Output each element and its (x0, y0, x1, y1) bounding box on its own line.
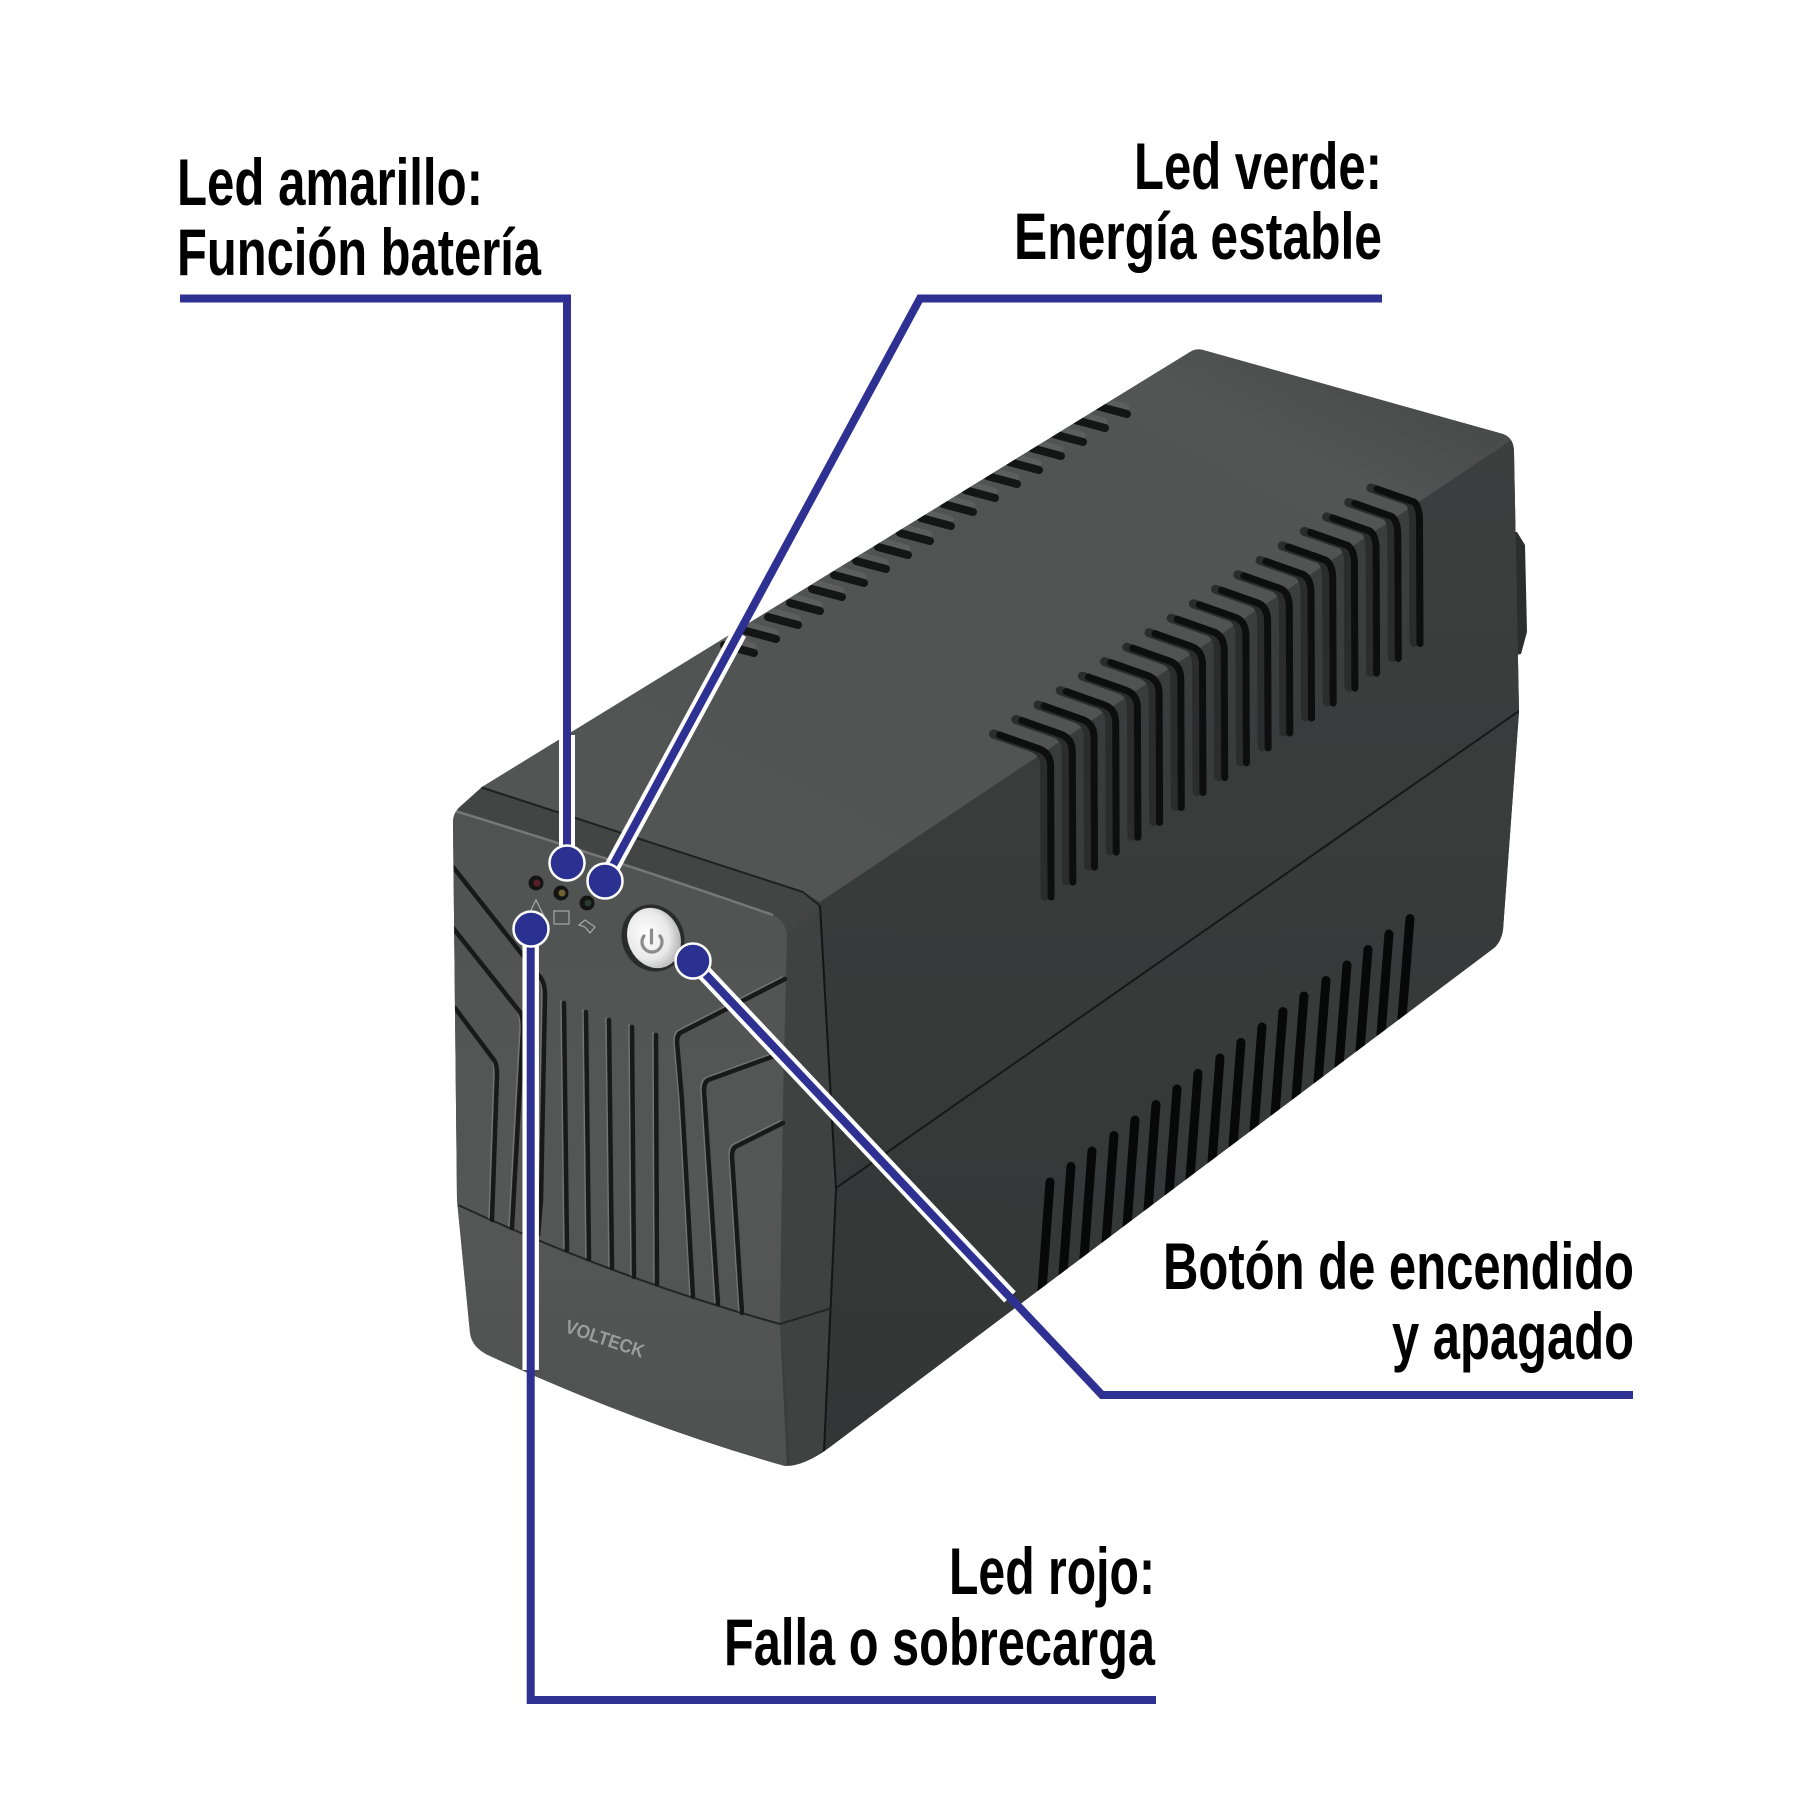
label: Boton de encendido: Botón de encendido (1163, 1229, 1634, 1303)
front rib highlights (488, 976, 783, 1312)
label: Led verde (1014, 129, 1382, 273)
leader line: Led verde (588, 298, 1382, 898)
label: Led amarillo: Función batería (177, 215, 542, 289)
top face (478, 345, 1516, 902)
label: Led rojo: Led rojo: (949, 1534, 1155, 1608)
label: Led amarillo: Led amarillo: (177, 145, 483, 219)
leader line: Led amarillo (180, 298, 584, 880)
label: Led rojo (724, 1534, 1156, 1679)
product: UPS unit (450, 345, 1527, 1470)
front panel top highlight (455, 811, 773, 915)
side seam line (836, 711, 1519, 1188)
LED: red (528, 876, 544, 890)
LED: green (580, 896, 594, 910)
label: Led verde: Energía estable (1014, 199, 1382, 273)
VOLTECK logo: VOLTECK (562, 1317, 647, 1363)
front panel ribs (453, 867, 785, 1313)
side face (820, 437, 1525, 1470)
top vent lip highlights (722, 400, 1125, 647)
LED: yellow (554, 886, 568, 900)
power button (611, 894, 695, 982)
label: Boton de encendido: y apagado (1392, 1299, 1634, 1373)
top cover strip (456, 786, 800, 912)
top cover seam (480, 787, 820, 906)
label: Boton de encendido (1163, 1229, 1634, 1373)
label: Led amarillo (177, 145, 542, 289)
leader line: boton (676, 944, 1633, 1395)
lower side vent slots (1042, 918, 1410, 1290)
leader line: Led rojo (514, 912, 1156, 1700)
front base seam (458, 1205, 832, 1324)
label: Led rojo: Falla o sobrecarga (724, 1605, 1156, 1679)
frame edge line (820, 905, 836, 1452)
icon: warning triangle (528, 900, 544, 916)
icon: power symbol (642, 930, 662, 952)
icon: power plug at the rear (1510, 532, 1527, 656)
UPS body silhouette (453, 349, 1519, 1466)
upper side vent bevels (994, 488, 1414, 896)
UPS faces and details (450, 345, 1525, 1470)
upper side vent slots (1000, 489, 1420, 897)
top vent slots (724, 406, 1127, 653)
label: Led verde: Led verde: (1134, 129, 1382, 203)
icon: power line (579, 920, 595, 933)
front frame right band (790, 1013, 835, 1466)
front panel (453, 812, 787, 1470)
icon: battery (554, 911, 569, 924)
